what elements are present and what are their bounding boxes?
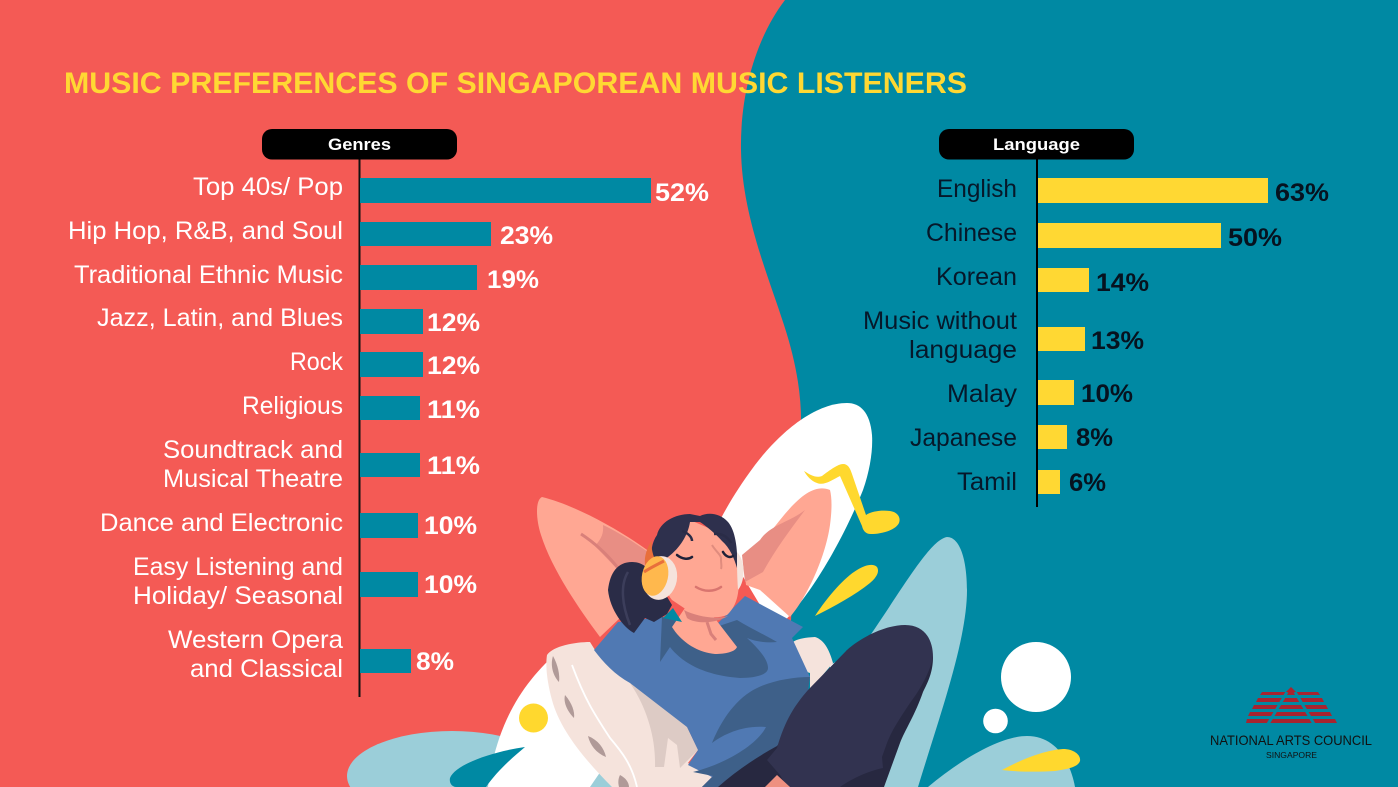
row: Tamil: Tamil <box>957 468 1017 496</box>
foot <box>765 775 790 787</box>
row: Western Opera <box>168 626 454 683</box>
headphone stripe <box>644 561 664 572</box>
headphone left cup inner <box>638 554 672 598</box>
row: English <box>937 175 1329 207</box>
row: Jazz: Jazz, Latin, and Blues <box>97 304 343 332</box>
row: Korean: Korean <box>936 263 1017 291</box>
title: MUSIC PREFERENCES OF SINGAPOREAN MUSIC LISTENERS <box>64 67 967 100</box>
light blue leaf bottom right <box>928 736 1075 787</box>
language heading pill <box>939 129 1134 160</box>
row: Dance: Dance and Electronic <box>100 509 343 537</box>
row: Rock: Rock <box>290 348 343 376</box>
nose <box>712 545 721 569</box>
axis <box>358 159 360 697</box>
yellow dot <box>519 704 548 732</box>
row: Chinese: Chinese <box>926 219 1017 247</box>
row: Jazz: 12% <box>427 309 480 337</box>
row: Tamil: 6% <box>1069 469 1106 497</box>
pillow <box>546 642 712 787</box>
row: Easy Listening: Easy Listening and <box>133 553 343 581</box>
illustration: background foliage <box>347 403 1080 787</box>
pants shadow underlay <box>718 650 933 787</box>
row: Western Opera: and Classical <box>190 655 343 683</box>
left arm crease <box>581 534 618 568</box>
row: English: 63% <box>1275 179 1329 207</box>
light blue leaf bottom left <box>347 731 557 787</box>
row: Soundtrack: Soundtrack and <box>163 436 343 464</box>
row: Jazz <box>97 304 480 337</box>
row: Korean <box>936 263 1149 297</box>
white circle small <box>983 709 1008 733</box>
row: Rock: 12% <box>427 352 480 380</box>
row: Top 40s/ Pop <box>193 173 709 207</box>
row: Hip Hop: Hip Hop, R&B, and Soul <box>68 217 343 245</box>
illustration: relaxing listener <box>537 488 933 787</box>
language heading pill: Language <box>993 135 1080 154</box>
white leaf lower <box>488 650 640 787</box>
panel: genres chart <box>68 129 709 697</box>
white sliver near right pillow <box>830 657 850 690</box>
row: Music without language: 13% <box>1091 327 1144 355</box>
right arm shade <box>742 510 805 582</box>
brow right <box>714 534 731 543</box>
ponytail highlight <box>623 572 630 625</box>
ponytail <box>608 562 672 633</box>
row: Dance: 10% <box>424 512 477 540</box>
row: Easy Listening <box>133 553 477 610</box>
headphone right cup <box>737 552 744 590</box>
headphone left cup <box>639 553 681 603</box>
logo mark <box>1246 687 1337 724</box>
row: Religious <box>242 392 480 424</box>
brow left <box>682 531 692 541</box>
genres heading pill: Genres <box>328 135 391 154</box>
hair <box>651 514 737 568</box>
row: Music without language: Music without <box>863 307 1017 335</box>
headphone band <box>645 540 655 565</box>
row: Japanese: Japanese <box>910 424 1017 452</box>
teal collar piece <box>663 608 682 622</box>
chin shadow <box>684 610 728 622</box>
row: Soundtrack: Musical Theatre <box>163 465 343 493</box>
row: Traditional Ethnic Music: 19% <box>487 266 539 294</box>
pillow shade <box>630 683 698 768</box>
row: Religious: Religious <box>242 392 343 420</box>
row: Dance <box>100 509 477 540</box>
row: Soundtrack: 11% <box>427 452 480 480</box>
light blue leaf right <box>840 537 967 787</box>
row: Korean: 14% <box>1096 269 1149 297</box>
row: Rock <box>290 348 480 380</box>
row: Malay <box>947 380 1133 408</box>
row: Hip Hop: 23% <box>500 222 553 250</box>
row: Tamil <box>957 468 1106 497</box>
axis <box>1036 159 1038 507</box>
logo: National Arts Council <box>1210 687 1372 760</box>
yellow drop <box>815 565 878 616</box>
panel: language chart <box>863 129 1329 507</box>
white leaf upper <box>715 403 872 630</box>
row: Western Opera: 8% <box>416 648 454 676</box>
row: Easy Listening: Holiday/ Seasonal <box>133 582 343 610</box>
row: Malay: 10% <box>1081 380 1133 408</box>
light blue triangle under pillow <box>590 768 612 787</box>
teal drop leaf <box>450 747 525 787</box>
mouth <box>696 587 721 591</box>
left arm shade <box>595 525 650 572</box>
shirt neckline shade <box>660 617 777 678</box>
right arm upper <box>743 488 832 617</box>
row: Japanese <box>910 424 1113 452</box>
row: Top 40s/ Pop: Top 40s/ Pop <box>193 173 343 201</box>
background: teal blob <box>741 0 1398 787</box>
row: Traditional Ethnic Music: Traditional Ethnic Music <box>74 261 343 289</box>
row: Religious: 11% <box>427 396 480 424</box>
neck line <box>707 622 716 640</box>
row: English: English <box>937 175 1017 203</box>
pillow seam <box>572 665 637 787</box>
row: Top 40s/ Pop: 52% <box>655 179 709 207</box>
eyes <box>677 552 733 559</box>
logo subname: SINGAPORE <box>1266 750 1317 760</box>
neck <box>672 605 737 654</box>
shirt <box>594 596 810 787</box>
pants <box>767 625 933 787</box>
genres heading pill <box>262 129 457 160</box>
row: Music without language <box>863 307 1144 364</box>
row: Music without language: language <box>909 336 1017 364</box>
face <box>662 520 739 617</box>
row: Traditional Ethnic Music <box>74 261 539 294</box>
white circle large <box>1001 642 1071 712</box>
shirt sleeve shade <box>693 677 810 787</box>
right pillow <box>788 637 833 690</box>
row: Malay: Malay <box>947 380 1018 408</box>
music note <box>804 464 900 534</box>
row: Western Opera: Western Opera <box>168 626 343 654</box>
logo name: NATIONAL ARTS COUNCIL <box>1210 732 1372 748</box>
left arm <box>537 497 660 637</box>
row: Japanese: 8% <box>1076 424 1113 452</box>
pillow dots <box>552 656 629 787</box>
row: Soundtrack <box>163 436 480 493</box>
row: Chinese: 50% <box>1228 224 1282 252</box>
row: Chinese <box>926 219 1282 252</box>
row: Hip Hop <box>68 217 553 250</box>
yellow leaf bottom right <box>1002 749 1080 772</box>
row: Easy Listening: 10% <box>424 571 477 599</box>
